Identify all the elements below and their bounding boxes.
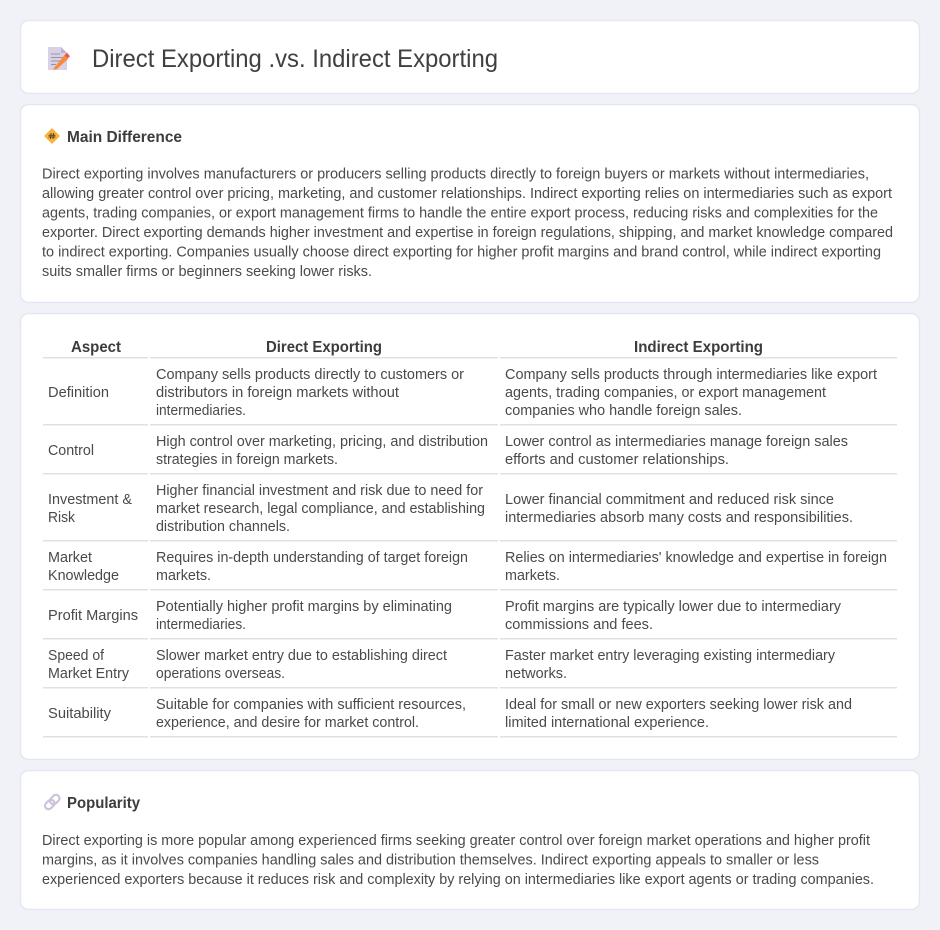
table row: investment and risk: Investment &	[48, 492, 132, 508]
table row: definition: Definition	[48, 385, 109, 401]
text block: popularity paragraph	[42, 833, 874, 888]
table row: profit margins: Potentially higher profit margins by eliminating	[156, 599, 452, 615]
text block: main difference paragraph: agents, trading companies, or export management firms to handle the entire export process, reducing risks and complexities for the	[42, 206, 878, 222]
table row: suitability: Suitability	[48, 706, 112, 722]
table row: control: Lower control as intermediaries manage foreign sales	[505, 434, 848, 450]
table row: speed of market entry: Market Entry	[48, 666, 130, 682]
table row: profit margins: Profit margins are typically lower due to intermediary	[505, 599, 842, 615]
table row: definition: distributors in foreign markets without	[156, 385, 399, 401]
table header row	[43, 339, 897, 358]
table row: speed of market entry: Slower market entry due to establishing direct	[156, 648, 447, 664]
table row: market knowledge: Knowledge	[48, 568, 119, 584]
text block: popularity paragraph: margins, as it involves companies handling sales and distribution themselves. Indirect exporting appeals to smaller or less	[42, 852, 819, 868]
table row: definition	[43, 367, 897, 426]
table row: market knowledge: Relies on intermediaries' knowledge and expertise in foreign	[505, 550, 887, 566]
table header row: Aspect	[71, 339, 122, 356]
table header row: Direct Exporting	[266, 339, 382, 356]
table row: suitability: limited international experience.	[505, 715, 709, 731]
heading: main difference: Main Difference	[67, 129, 182, 146]
table row: investment and risk: Risk	[48, 510, 76, 526]
table row: market knowledge	[43, 550, 897, 590]
text block: main difference paragraph: to indirect exporting. Companies usually choose direct exporting for higher profit margins and brand control, while indirect exporting	[42, 244, 881, 260]
text block: main difference paragraph: suits smaller firms or beginners seeking lower risks.	[42, 264, 372, 280]
table row: profit margins: Profit Margins	[48, 608, 138, 624]
title: Direct Exporting .vs. Indirect Exporting	[92, 45, 498, 73]
table row: investment and risk: intermediaries absorb many costs and responsibilities.	[505, 510, 853, 526]
table row: definition: Company sells products through intermediaries like export	[505, 367, 877, 383]
table row: investment and risk	[43, 483, 897, 542]
table row: control	[43, 434, 897, 474]
table row: profit margins: commissions and fees.	[505, 617, 653, 633]
table row: suitability: Suitable for companies with sufficient resources,	[156, 697, 466, 713]
table row: control: High control over marketing, pricing, and distribution	[156, 434, 488, 450]
icon: diamond sign	[44, 128, 60, 144]
icon: memo with pencil	[48, 47, 70, 70]
table row: control: efforts and customer relationships.	[505, 452, 729, 468]
table row: market knowledge: markets.	[156, 568, 211, 584]
table row: market knowledge: markets.	[505, 568, 560, 584]
table row: control: strategies in foreign markets.	[156, 452, 338, 468]
table row: speed of market entry	[43, 648, 897, 688]
heading: popularity: Popularity	[67, 795, 140, 812]
table row: profit margins	[43, 599, 897, 640]
text block: main difference paragraph: allowing greater control over pricing, marketing, and customer relationships. Indirect exporting relies on intermediaries such as export	[42, 186, 892, 202]
table header row: Indirect Exporting	[634, 339, 763, 356]
icon: chain link	[44, 793, 61, 811]
table row: definition: Company sells products directly to customers or	[156, 367, 464, 383]
table row: investment and risk: distribution channels.	[156, 519, 290, 535]
table row: suitability: experience, and desire for market control.	[156, 715, 419, 731]
table row: investment and risk: Higher financial investment and risk due to need for	[156, 483, 483, 499]
text block: popularity paragraph: Direct exporting is more popular among experienced firms seeking greater control over foreign market operations and higher profit	[42, 833, 870, 849]
table row: investment and risk: Lower financial commitment and reduced risk since	[505, 492, 834, 508]
text block: main difference paragraph	[42, 167, 893, 280]
table row: definition: agents, trading companies, or export management	[505, 385, 826, 401]
table row: investment and risk: market research, legal compliance, and establishing	[156, 501, 485, 517]
table row: profit margins: intermediaries.	[156, 617, 246, 633]
table row: market knowledge: Market	[48, 550, 92, 566]
text block: popularity paragraph: experienced exporters because it reduces risk and complexity by relying on intermediaries like export agents or trading companies.	[42, 872, 874, 888]
table row: speed of market entry: Faster market entry leveraging existing intermediary	[505, 648, 836, 664]
panel: comparison table	[20, 314, 920, 760]
table row: control: Control	[48, 443, 94, 459]
table row: definition: companies who handle foreign sales.	[505, 403, 742, 419]
text block: main difference paragraph: exporter. Direct exporting demands higher investment and expertise in foreign regulations, shipping, and market knowledge compared	[42, 225, 893, 241]
table row: suitability	[43, 697, 897, 738]
table row: market knowledge: Requires in-depth understanding of target foreign	[156, 550, 468, 566]
table row: speed of market entry: networks.	[505, 666, 567, 682]
panel: popularity	[20, 770, 920, 910]
text block: main difference paragraph: Direct exporting involves manufacturers or producers selling products directly to foreign buyers or markets without intermediaries,	[42, 167, 869, 183]
panel: main difference	[20, 104, 920, 302]
table row: speed of market entry: Speed of	[48, 648, 105, 664]
table row: speed of market entry: operations overseas.	[156, 666, 285, 682]
table row: definition: intermediaries.	[156, 403, 246, 419]
table row: suitability: Ideal for small or new exporters seeking lower risk and	[505, 697, 852, 713]
panel: title header	[20, 20, 920, 94]
